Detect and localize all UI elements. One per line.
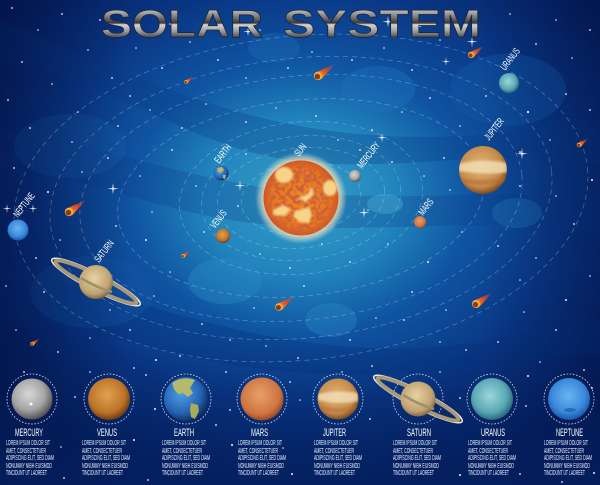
orbit labels: SATURN <box>93 238 117 265</box>
card: uranus: LOREM IPSUM DOLOR SIT <box>468 440 512 447</box>
card: mars: ADIPISCING ELIT, SED DIAM <box>238 455 286 462</box>
card: venus: VENUS <box>97 427 117 439</box>
card: mercury: ADIPISCING ELIT, SED DIAM <box>6 455 54 462</box>
orbit labels: MERCURY <box>356 140 383 171</box>
card: mercury: AMET, CONSECTETUER <box>6 448 46 455</box>
card: earth: EARTH <box>174 427 194 439</box>
card: jupiter <box>313 374 363 477</box>
card: uranus: ADIPISCING ELIT, SED DIAM <box>468 455 516 462</box>
card: mercury: MERCURY <box>15 427 43 439</box>
title: SYSTEM <box>283 3 481 46</box>
card: uranus: URANUS <box>481 427 505 439</box>
card: venus: NONUMMY NIBH EUISMOD <box>82 463 128 470</box>
sparkle stars <box>2 16 528 218</box>
planet: neptune <box>8 220 28 240</box>
orbit labels: NEPTUNE <box>12 191 38 220</box>
card: saturn: NONUMMY NIBH EUISMOD <box>393 463 439 470</box>
orbit labels: SUN <box>293 142 309 159</box>
card: jupiter: AMET, CONSECTETUER <box>314 448 354 455</box>
orbit labels: URANUS <box>499 46 523 73</box>
orbit labels: EARTH <box>213 143 234 166</box>
card: earth <box>161 374 211 477</box>
planet: mercury <box>349 170 361 182</box>
card: earth: AMET, CONSECTETUER <box>162 448 202 455</box>
card: venus: AMET, CONSECTETUER <box>82 448 122 455</box>
card: mercury: TINCIDUNT UT LAOREET <box>6 470 47 477</box>
card: saturn: SATURN <box>407 427 431 439</box>
card: venus: TINCIDUNT UT LAOREET <box>82 470 123 477</box>
planet: mars <box>414 216 426 228</box>
card: mars: MARS <box>251 427 268 439</box>
card: saturn: ADIPISCING ELIT, SED DIAM <box>393 455 441 462</box>
card: earth: ADIPISCING ELIT, SED DIAM <box>162 455 210 462</box>
title: SOLAR <box>101 3 263 46</box>
card: earth: LOREM IPSUM DOLOR SIT <box>162 440 206 447</box>
card: mars: TINCIDUNT UT LAOREET <box>238 470 279 477</box>
card: saturn: LOREM IPSUM DOLOR SIT <box>393 440 437 447</box>
comets <box>30 46 588 346</box>
card: mercury: NONUMMY NIBH EUISMOD <box>6 463 52 470</box>
orbit labels: MARS <box>417 197 437 218</box>
card: saturn: AMET, CONSECTETUER <box>393 448 433 455</box>
sun <box>255 152 347 244</box>
card: uranus: NONUMMY NIBH EUISMOD <box>468 463 514 470</box>
card: jupiter: JUPITER <box>323 427 346 439</box>
card: saturn: TINCIDUNT UT LAOREET <box>393 470 434 477</box>
title <box>101 3 481 46</box>
card: mars: LOREM IPSUM DOLOR SIT <box>238 440 282 447</box>
card: uranus: TINCIDUNT UT LAOREET <box>468 470 509 477</box>
card: neptune <box>544 374 594 477</box>
card: jupiter: LOREM IPSUM DOLOR SIT <box>314 440 358 447</box>
card: uranus: AMET, CONSECTETUER <box>468 448 508 455</box>
card: venus <box>82 374 134 477</box>
orbits <box>0 7 600 389</box>
planet: earth <box>214 166 228 180</box>
card: mercury <box>6 374 57 477</box>
card: mars: NONUMMY NIBH EUISMOD <box>238 463 284 470</box>
card: mars: AMET, CONSECTETUER <box>238 448 278 455</box>
card: mercury: LOREM IPSUM DOLOR SIT <box>6 440 50 447</box>
card: earth: NONUMMY NIBH EUISMOD <box>162 463 208 470</box>
orbit labels: JUPITER <box>483 116 507 143</box>
card: saturn <box>370 369 466 477</box>
planet: venus <box>216 229 230 243</box>
card: jupiter: NONUMMY NIBH EUISMOD <box>314 463 360 470</box>
orbit labels: VENUS <box>209 208 230 231</box>
card: venus: ADIPISCING ELIT, SED DIAM <box>82 455 130 462</box>
orbit labels <box>12 46 523 265</box>
planet: saturn <box>48 252 144 312</box>
planet: uranus <box>499 73 519 93</box>
planet: jupiter <box>459 146 507 194</box>
card: venus: LOREM IPSUM DOLOR SIT <box>82 440 126 447</box>
card: jupiter: TINCIDUNT UT LAOREET <box>314 470 355 477</box>
card: mars <box>237 374 287 477</box>
card: earth: TINCIDUNT UT LAOREET <box>162 470 203 477</box>
card: uranus <box>467 374 517 477</box>
card: jupiter: ADIPISCING ELIT, SED DIAM <box>314 455 362 462</box>
